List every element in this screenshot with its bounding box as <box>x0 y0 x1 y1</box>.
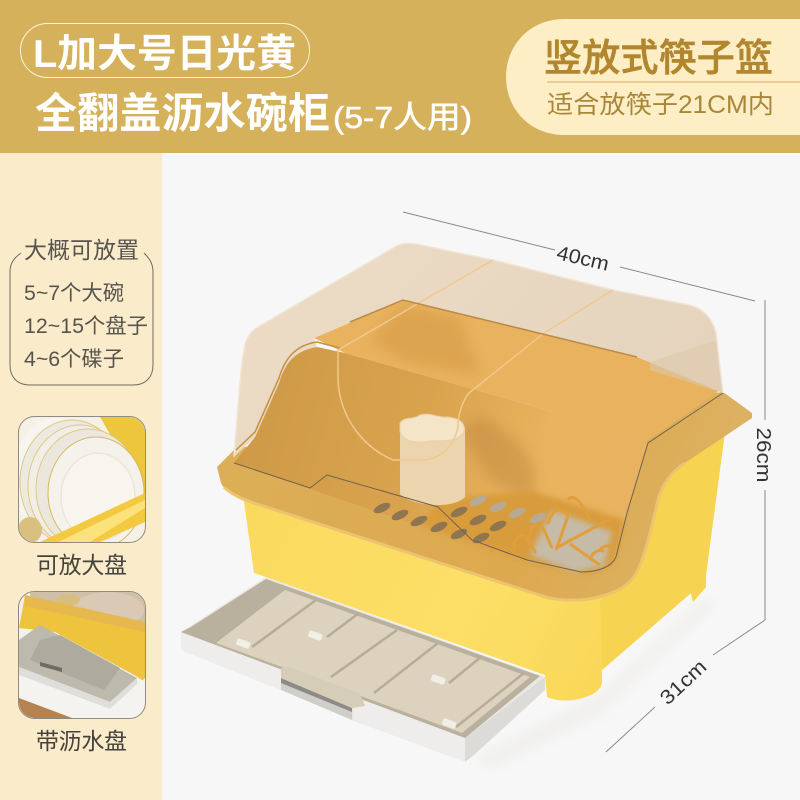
dish rack <box>490 497 612 565</box>
dimension: height 26cm: 26cm <box>752 428 774 482</box>
drip tray <box>181 577 545 762</box>
left sidebar panel <box>0 153 162 800</box>
title: product name: (5-7人用) <box>333 100 472 135</box>
rim lower highlight <box>224 463 685 600</box>
capacity box: 4~6个碟子 <box>24 348 124 371</box>
capacity box: 12~15个盘子 <box>24 315 148 338</box>
dimension: depth 31cm: 31cm <box>656 656 711 710</box>
title: product name: 全翻盖沥水碗柜 <box>35 90 330 137</box>
base side face <box>600 432 725 670</box>
photo: large plates <box>13 417 145 549</box>
lid interior orange wall <box>234 347 648 574</box>
lid top surface orange <box>314 300 720 443</box>
label: drip tray: 带沥水盘 <box>36 728 127 754</box>
capacity box: 大概可放置 <box>24 237 139 263</box>
shadow on lid top <box>370 305 480 375</box>
title: product name <box>35 90 472 137</box>
dimension: width 40cm <box>403 212 755 301</box>
yellow base <box>243 430 725 701</box>
capacity box <box>10 237 153 385</box>
shadow on wall <box>460 415 535 500</box>
label: large plates: 可放大盘 <box>36 552 127 578</box>
title pill: size and colour: L加大号日光黄 <box>33 33 296 76</box>
lid edge outlines <box>234 243 723 572</box>
callout: chopstick basket <box>506 19 800 135</box>
dimension: depth 31cm <box>606 620 765 752</box>
lid rear translucent surface <box>234 243 723 457</box>
dimension: width 40cm: 40cm <box>554 242 611 276</box>
capacity box: 5~7个大碗 <box>24 282 124 305</box>
lid right corner shading <box>650 340 723 393</box>
photo 1 border <box>18 416 146 542</box>
callout: chopstick basket: 适合放筷子21CM内 <box>547 91 774 119</box>
header band <box>0 0 800 153</box>
dark floor near the rack <box>420 490 625 574</box>
light area behind dish rack <box>530 510 612 572</box>
callout: chopstick basket: 竖放式筷子篮 <box>544 38 773 80</box>
utensil cup <box>400 414 465 505</box>
soft floor shadow <box>475 600 720 770</box>
product: dish cabinet <box>181 243 752 770</box>
photo: drip tray <box>19 592 145 718</box>
tray rim of base <box>217 392 752 600</box>
drain slots <box>372 494 548 545</box>
photo 2 border <box>18 592 146 718</box>
